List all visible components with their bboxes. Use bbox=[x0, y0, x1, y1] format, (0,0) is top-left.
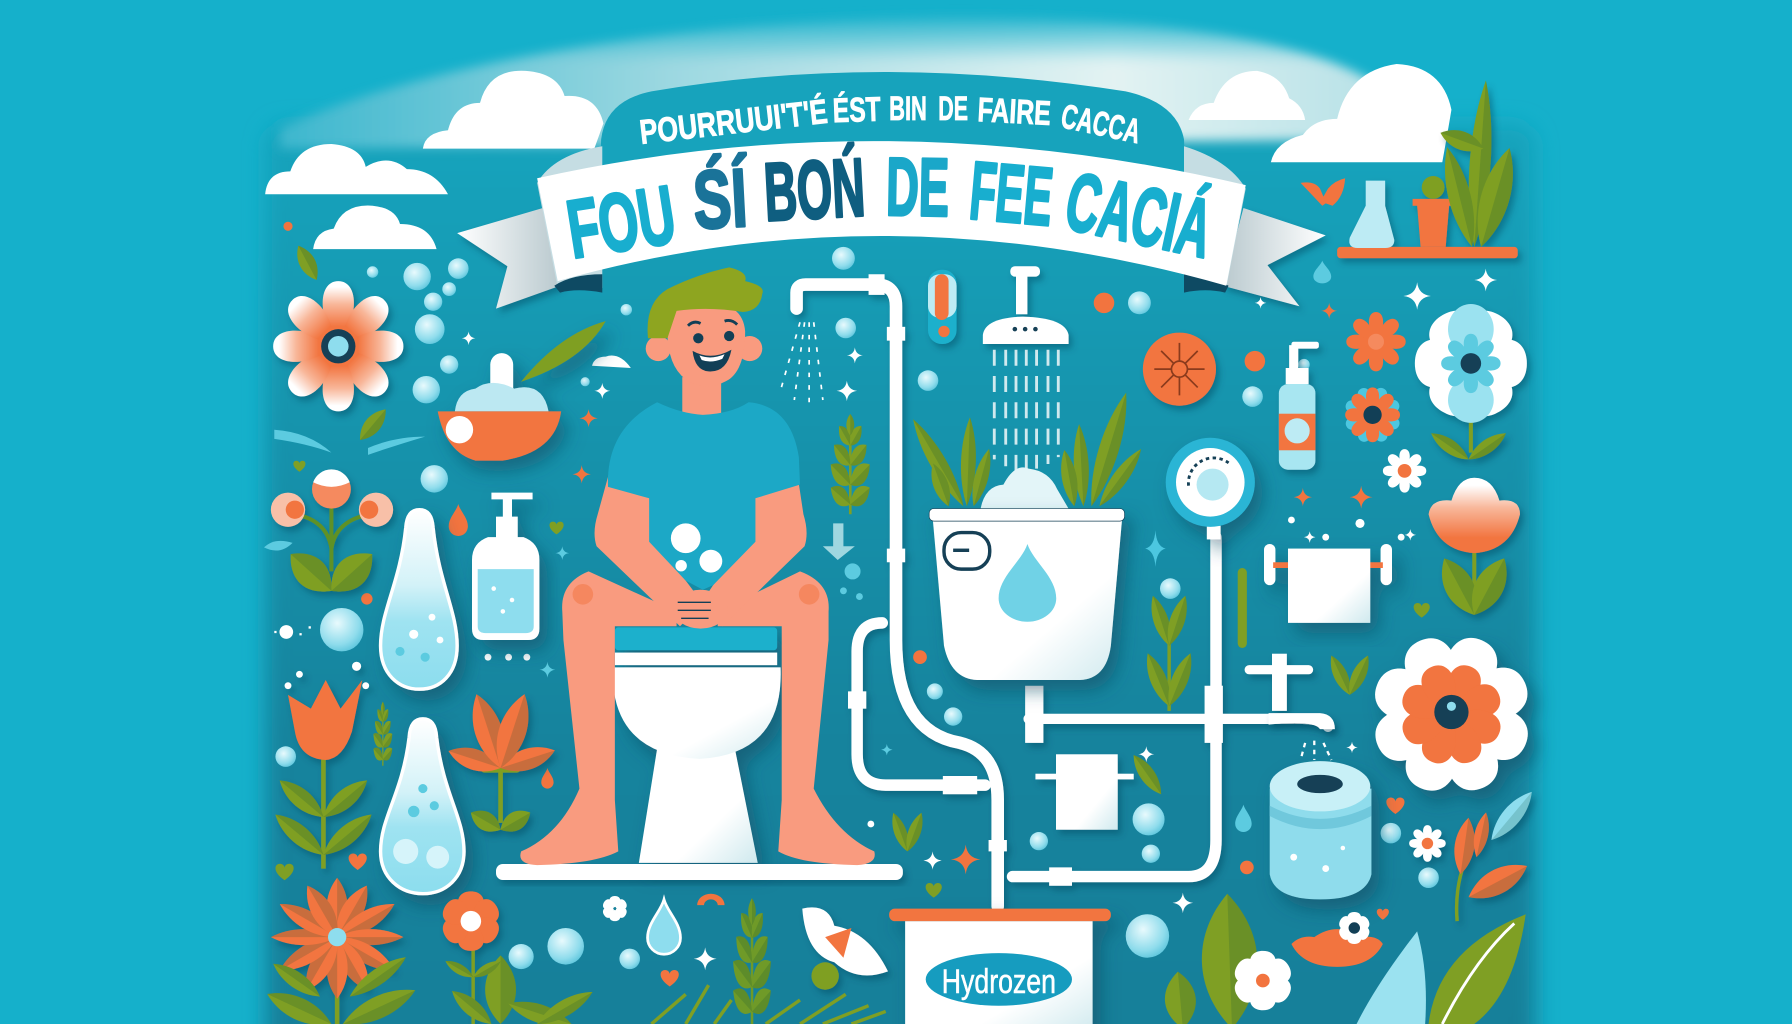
feather flowers bottom right bbox=[1409, 786, 1539, 921]
toilet seat stripe bbox=[615, 653, 777, 665]
shower spray left bbox=[779, 322, 823, 402]
right arm bbox=[699, 469, 807, 626]
logo text: Hydrozen bbox=[942, 963, 1056, 1001]
water drop large: lower bbox=[381, 719, 464, 894]
pipe couplings bbox=[857, 327, 1214, 877]
subtitle text: DE bbox=[938, 90, 968, 128]
subtitle text: CACCA bbox=[1058, 98, 1144, 151]
toilet paper holder bbox=[1264, 544, 1392, 623]
clouds bbox=[265, 64, 1451, 249]
flower: top left bbox=[273, 281, 403, 411]
foam on cistern bbox=[981, 467, 1069, 509]
tap water bbox=[1301, 741, 1331, 760]
toilet bowl bbox=[613, 667, 781, 759]
flower: white daisy bbox=[1383, 449, 1426, 493]
orange dish bbox=[1291, 929, 1383, 967]
water drop large: upper bbox=[381, 510, 457, 689]
shower head bbox=[983, 266, 1069, 344]
neck bbox=[682, 377, 721, 418]
flower: white bottom bbox=[802, 907, 888, 990]
plant bbox=[1436, 80, 1523, 251]
flask bbox=[1349, 181, 1394, 248]
flower: orange lily bbox=[445, 690, 558, 838]
bottom right foliage bbox=[1163, 893, 1526, 1024]
small fern left bbox=[372, 702, 394, 766]
blue leaf bbox=[1357, 931, 1426, 1024]
soap pump bottle left bbox=[472, 493, 539, 640]
right leg bbox=[718, 571, 875, 865]
small plants centre right bbox=[888, 568, 1374, 854]
logo oval bbox=[926, 953, 1072, 1006]
ears bbox=[646, 336, 671, 361]
icon: butterfly bbox=[1301, 178, 1345, 206]
fern bottom centre bbox=[730, 898, 774, 1024]
speckled sky arc bbox=[280, 18, 1392, 149]
paper sheet on pipes bbox=[1035, 754, 1134, 830]
shelf with flask, pot and plant bbox=[1337, 80, 1523, 258]
capsule icon bbox=[928, 270, 957, 344]
cistern bbox=[929, 509, 1125, 680]
main title text: CACIÁ bbox=[1058, 156, 1220, 275]
flower: multicolour bbox=[1335, 378, 1410, 452]
plant by the gauge bbox=[1140, 593, 1198, 711]
gauge bbox=[1166, 438, 1255, 539]
tap bbox=[1245, 654, 1335, 729]
small decor: white dots and blue bbox=[274, 356, 1405, 921]
blue roll bbox=[1270, 761, 1371, 899]
arrow pointing down bbox=[823, 523, 855, 560]
main title text: FOU bbox=[561, 169, 681, 276]
banner: right ribbon tail bbox=[1223, 208, 1326, 306]
face bbox=[667, 302, 745, 386]
flower: three orange buds bbox=[271, 469, 393, 602]
flower: big white and orange bbox=[1347, 610, 1556, 818]
banner: right fold bbox=[1184, 146, 1246, 288]
main title text: DE bbox=[885, 142, 950, 234]
subtitle text bbox=[638, 89, 1144, 152]
leaves: bottom left bbox=[263, 951, 420, 1024]
banner: fold shadows bbox=[554, 274, 1229, 293]
banner: white main ribbon bbox=[537, 141, 1246, 286]
subtitle text: BIN bbox=[889, 90, 927, 128]
sparkles bbox=[462, 269, 1497, 970]
flower: orange tulip right bbox=[1429, 478, 1520, 622]
shower water bbox=[994, 350, 1058, 471]
box lid bbox=[889, 909, 1111, 921]
left arm bbox=[595, 469, 703, 626]
subtitle text: FAIRE bbox=[977, 91, 1052, 133]
eyes and brows bbox=[693, 333, 703, 343]
toilet bbox=[613, 627, 781, 863]
flower: small white bbox=[1337, 912, 1372, 944]
bubbles and dots scattered bbox=[275, 247, 1439, 969]
shirt bbox=[608, 402, 800, 590]
soap bottle right bbox=[1279, 342, 1319, 470]
lower pipe bbox=[1013, 537, 1216, 877]
toilet seat lid bbox=[615, 627, 777, 650]
knee highlights bbox=[573, 584, 593, 605]
side pipe bbox=[857, 623, 985, 785]
pipes network bbox=[797, 274, 1328, 906]
striped green leaf bbox=[1429, 914, 1526, 1024]
grass bottom bbox=[651, 985, 886, 1024]
banner: left fold bbox=[537, 146, 602, 288]
bowl of foam with leaf bbox=[438, 321, 606, 461]
orange disc icon bbox=[1143, 333, 1216, 406]
subtitle text: POURRUUI'T'É bbox=[638, 91, 829, 152]
toilet base bbox=[639, 749, 758, 863]
flower: big orange bottom left bbox=[271, 878, 403, 1024]
pot bbox=[1413, 199, 1454, 247]
big green leaf bbox=[1200, 893, 1260, 1024]
bubbles on shirt bbox=[671, 523, 701, 553]
icon: splash and leaf accents bbox=[274, 242, 425, 455]
small decor: orange bbox=[283, 222, 1405, 987]
main title text: BOŃ bbox=[762, 142, 867, 239]
small decor: green bbox=[275, 461, 1430, 898]
main title text bbox=[561, 142, 1220, 276]
hair bbox=[648, 267, 763, 338]
cistern feed pipe bbox=[1029, 719, 1328, 727]
banner: upper teal ribbon bbox=[599, 72, 1186, 211]
flower: small orange bbox=[439, 891, 503, 1024]
flower: small orange bbox=[1346, 312, 1406, 371]
fern by the man bbox=[827, 414, 874, 514]
main title text: FEE bbox=[966, 146, 1056, 243]
subtitle text: ÉST bbox=[832, 89, 881, 130]
icon: water drop bottom bbox=[648, 899, 680, 954]
main title text: ŚÍ bbox=[691, 153, 751, 247]
hands bbox=[673, 590, 728, 629]
floor platform bbox=[496, 864, 903, 880]
flower: orange tulip bbox=[269, 662, 378, 869]
left leg bbox=[520, 571, 677, 865]
man bbox=[520, 267, 875, 865]
flower: white and blue bbox=[1390, 285, 1551, 465]
mouth bbox=[693, 350, 731, 371]
leaves: bottom centre bbox=[443, 955, 597, 1024]
flowers right column bbox=[1335, 312, 1426, 493]
main pipe bbox=[797, 285, 998, 906]
cistern badge bbox=[944, 533, 990, 569]
title banner bbox=[457, 72, 1326, 309]
flower: white with orange centre bbox=[1231, 951, 1295, 1010]
banner: left ribbon tail bbox=[457, 208, 560, 309]
Hydrozen box bbox=[889, 909, 1111, 1024]
plants in the cistern bbox=[906, 390, 1147, 511]
cistern water drop bbox=[999, 544, 1056, 622]
